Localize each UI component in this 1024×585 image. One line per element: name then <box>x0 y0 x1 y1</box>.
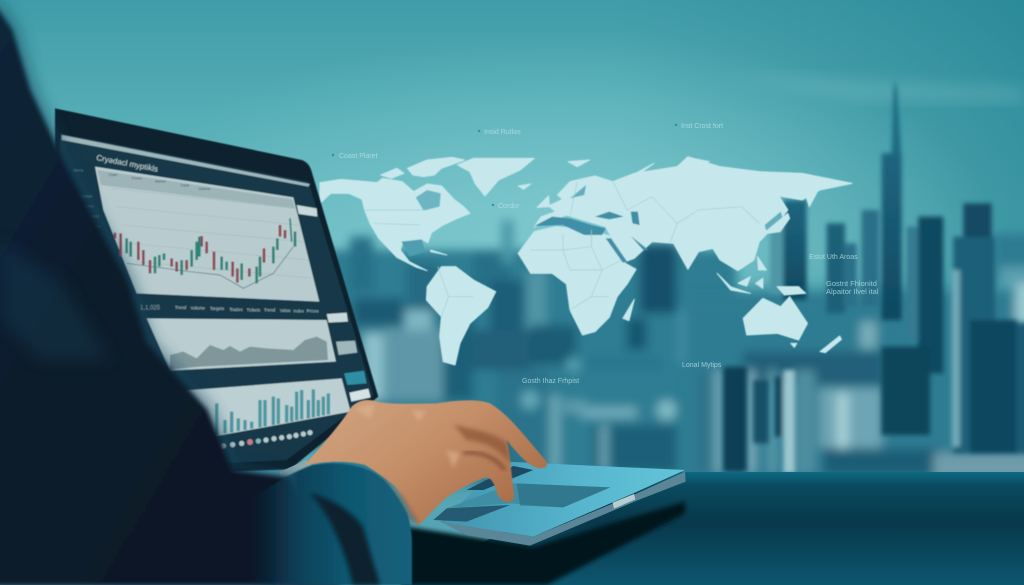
city haze base <box>320 290 1024 485</box>
label: indian ocean: Lonal Mytips <box>682 362 722 369</box>
tab row: Trend <box>264 308 276 313</box>
laptop base and trackpad <box>280 460 686 585</box>
label: north atlantic: Insid Rutlas <box>484 129 521 136</box>
label: north west: Coast Plaret <box>339 153 378 160</box>
finger shadow on deck <box>433 505 510 522</box>
bar chart panel <box>183 378 351 436</box>
candle chart mini labels: Market <box>155 180 166 184</box>
country borders <box>365 182 759 317</box>
shadow under index finger <box>453 424 510 463</box>
left sidebar text: Trades <box>87 214 99 219</box>
laptop screen <box>55 108 378 477</box>
candle chart mini labels: Prices <box>132 176 142 180</box>
tab row: Prices <box>307 309 319 314</box>
deck front edge <box>440 472 686 546</box>
candlestick chart panel <box>95 167 319 302</box>
tab row <box>140 305 319 314</box>
label: pacific: Gostnt Fhlonitd <box>826 279 877 288</box>
deck top <box>440 462 685 537</box>
wrist shadow <box>380 477 420 525</box>
blurred city, left part <box>323 220 737 477</box>
label: south atlantic: Gosth Ihaz Frhpist <box>522 378 579 385</box>
screen body <box>60 133 373 470</box>
hinge strip <box>280 460 313 478</box>
North America <box>320 178 470 271</box>
tab row: Volume <box>191 305 206 310</box>
Gulf of Mexico and Caribbean <box>401 239 425 257</box>
label: asia: Estot Uth Aroas <box>809 254 858 261</box>
map labels <box>332 123 879 385</box>
tab row: Tickets <box>247 307 260 312</box>
dock icons <box>221 430 313 449</box>
table surface <box>400 472 1024 585</box>
side buttons <box>297 205 371 402</box>
Greenland <box>457 158 534 196</box>
dashboard title: Cryǝdacl myptikls <box>96 153 159 174</box>
label: atlantic: Cordor <box>498 203 520 210</box>
label: pacific <box>826 279 879 296</box>
Baltic and Sea of Japan <box>570 185 784 232</box>
area chart panel <box>147 318 336 371</box>
gap between middle and ring finger <box>463 453 505 470</box>
Red Sea and Gulf <box>606 236 649 263</box>
left sidebar text: Assets <box>89 234 101 239</box>
hand on trackpad <box>305 400 547 525</box>
tab row: Trend <box>175 305 187 310</box>
left sidebar text <box>73 168 102 249</box>
keyboard edge <box>467 466 533 490</box>
tab row: Trades <box>229 307 243 312</box>
tab row: Targets <box>210 306 224 311</box>
left sidebar text: Menu <box>73 168 83 173</box>
sleeve fold shadow <box>310 493 380 585</box>
tab row: Index <box>293 308 305 313</box>
screen frame <box>55 108 378 477</box>
label: pacific: Alpaitor Ilvel ital <box>826 287 879 296</box>
tab row: 1,1,025 <box>140 305 161 311</box>
left sidebar text: Market <box>80 193 93 198</box>
side port <box>613 494 635 509</box>
Arctic islands <box>381 157 465 178</box>
knuckle highlights <box>355 404 460 468</box>
islands <box>431 157 841 353</box>
left sidebar text: Index <box>84 204 94 209</box>
tab row: Value <box>280 308 291 313</box>
hand back and fingers <box>305 400 547 525</box>
header strip <box>62 135 310 187</box>
world map overlay <box>320 157 852 365</box>
shirt sleeve <box>250 463 412 585</box>
candle chart mini labels: Trade <box>180 184 189 188</box>
left sidebar text: Volume <box>87 224 101 229</box>
candle chart mini labels: Volume <box>198 187 211 191</box>
blurred city, right part <box>687 80 1024 483</box>
Hudson Bay and lakes <box>416 190 441 211</box>
mid-ground haze <box>687 233 1024 483</box>
Africa <box>518 227 636 335</box>
Mediterranean and Black Sea <box>534 212 640 235</box>
trackpad reflection <box>517 483 610 507</box>
trackpad <box>447 483 611 508</box>
shirt highlight <box>0 240 110 360</box>
Eurasia <box>534 157 852 271</box>
laptop shadow reflection <box>403 502 685 585</box>
towers <box>723 80 1024 473</box>
left sidebar text: Prices <box>91 244 102 249</box>
Australia <box>743 297 807 340</box>
South America <box>426 267 496 365</box>
label: north east: Inst Crost fort <box>681 123 723 130</box>
shoulder soft blue edge <box>0 5 340 585</box>
candle chart mini labels: Chart <box>108 173 117 177</box>
candle chart mini labels <box>108 173 211 191</box>
person shoulder and arm <box>0 5 340 585</box>
